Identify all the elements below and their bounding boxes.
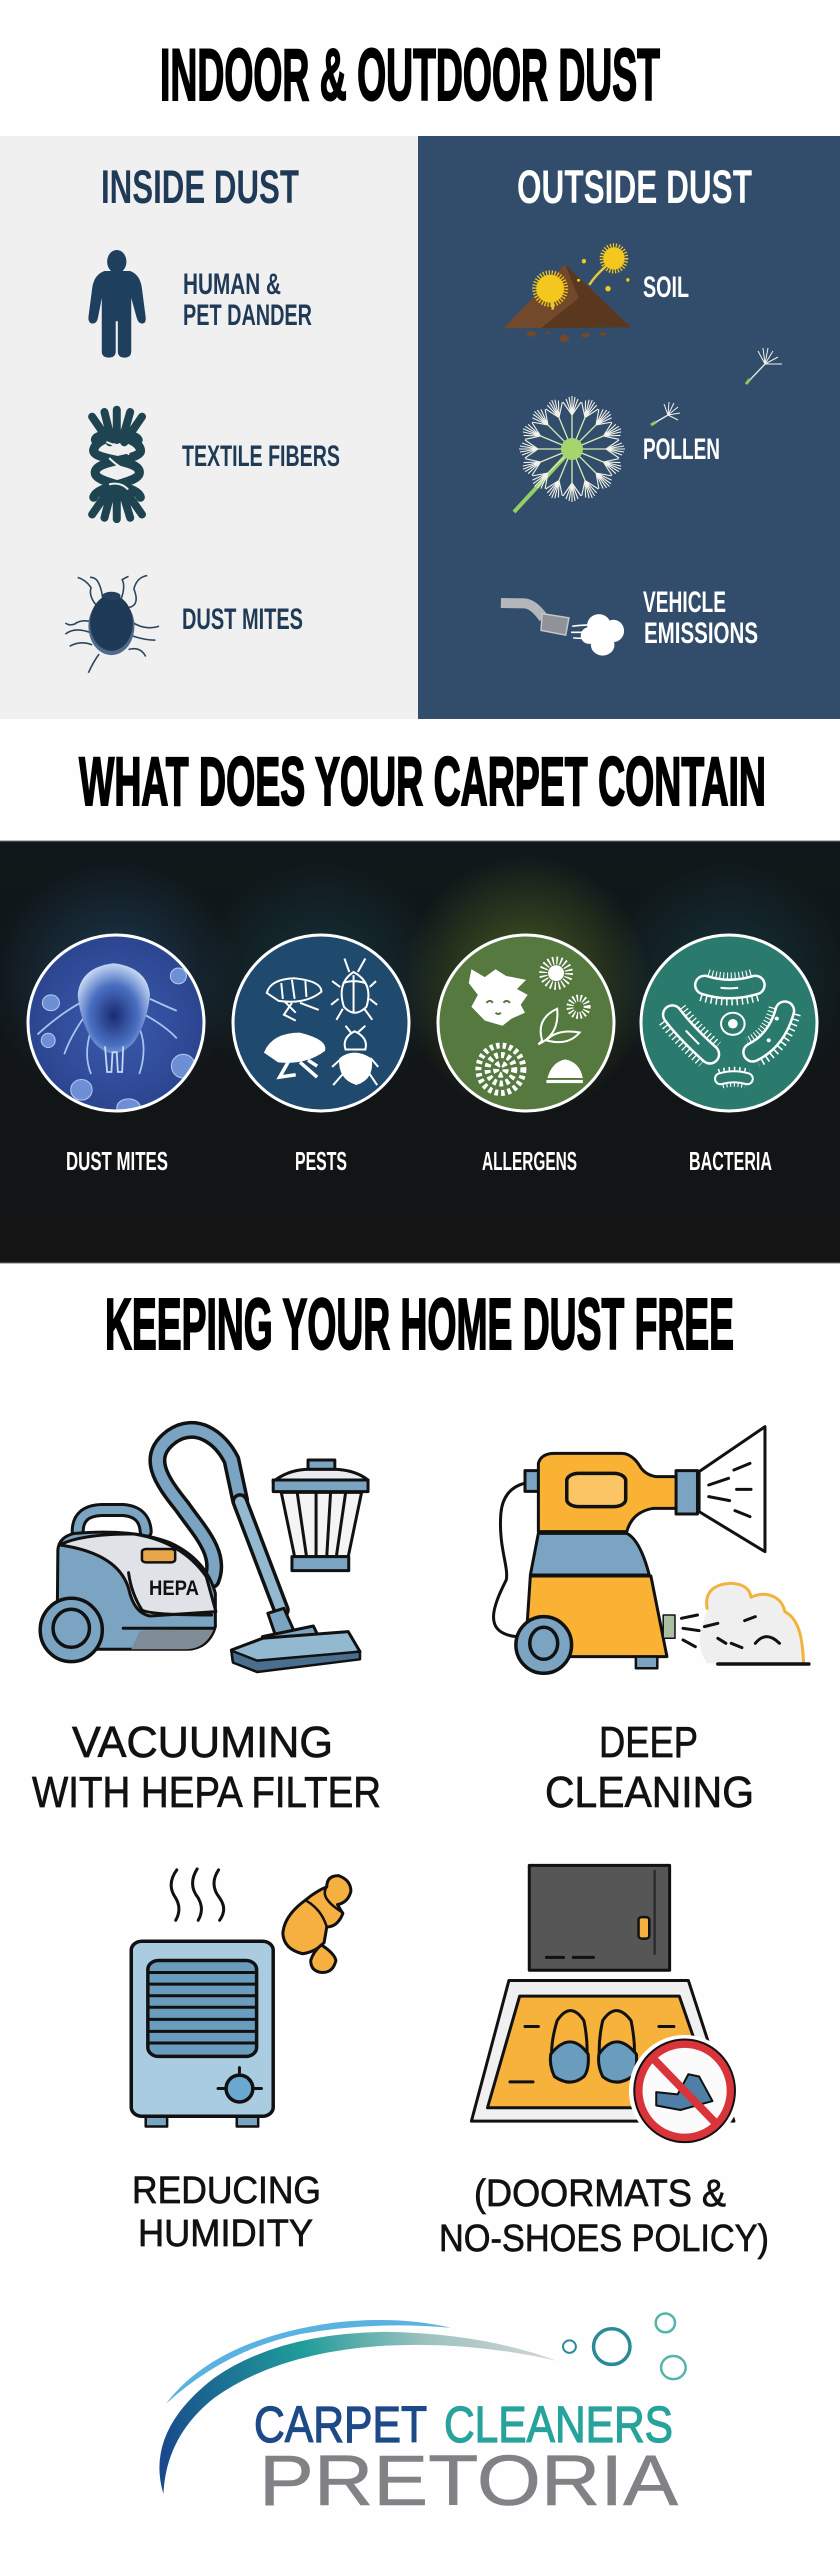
- icon: dust mite: [65, 575, 159, 673]
- text: doormats and no-shoes policy: NO-SHOES POLICY): [439, 2218, 769, 2260]
- label: textile fibers: TEXTILE FIBERS: [182, 440, 340, 473]
- label: HEPA on vacuum: HEPA: [149, 1577, 199, 1600]
- text: doormats and no-shoes policy: (DOORMATS &: [474, 2173, 726, 2215]
- panel: carpet contents dark band: [0, 840, 840, 1264]
- panel: outside dust: [418, 136, 840, 719]
- icon: pet face: [469, 969, 528, 1026]
- label: dust mites: DUST MITES: [182, 603, 303, 636]
- icon: textile fibers rope: [92, 410, 142, 519]
- label: allergens: ALLERGENS: [482, 1146, 577, 1176]
- icon: pollen cluster: [478, 1046, 523, 1093]
- label: pet dander line: PET DANDER: [183, 299, 312, 332]
- icon: flea outline: [267, 978, 321, 1021]
- logo swoosh and bubbles: [159, 2314, 686, 2494]
- text: vacuuming with HEPA filter: WITH HEPA FILTER: [32, 1768, 381, 1817]
- label: vehicle: VEHICLE: [643, 586, 726, 619]
- text: vacuuming with HEPA filter: VACUUMING: [72, 1718, 333, 1767]
- icon: small burst: [570, 998, 587, 1015]
- icon: allergens circle: [438, 935, 614, 1111]
- icon: solid flea: [265, 1034, 324, 1062]
- panel: inside dust: [0, 136, 418, 719]
- logo text: pretoria: PRETORIA: [259, 2442, 679, 2521]
- icon: floating seed top right: [746, 348, 782, 384]
- text: reducing humidity: HUMIDITY: [138, 2213, 313, 2255]
- text: doormats and no-shoes policy: [439, 2173, 769, 2260]
- text: vacuuming with HEPA filter: [32, 1718, 381, 1817]
- icon: vehicle exhaust: [501, 603, 624, 656]
- label: pests: PESTS: [295, 1146, 347, 1176]
- icon: dehumidifier: [131, 1869, 351, 2127]
- label: pollen: POLLEN: [643, 433, 720, 466]
- label: human and pet dander: HUMAN &: [183, 268, 281, 301]
- icon: deep cleaning machine: [494, 1427, 809, 1673]
- icon: leaves: [538, 1009, 580, 1044]
- label: emissions: EMISSIONS: [644, 617, 758, 650]
- icon: no shoes sign: [629, 2035, 740, 2147]
- icon: floating seed middle: [651, 402, 680, 425]
- icon: beetle outline: [331, 959, 377, 1020]
- text: reducing humidity: REDUCING: [132, 2170, 321, 2212]
- icon: dust mite microscope circle: [28, 935, 204, 1116]
- icon: sun spore: [548, 965, 564, 981]
- label: dust mites: DUST MITES: [66, 1146, 168, 1176]
- text: deep cleaning: [545, 1718, 754, 1817]
- icon: solid beetle: [340, 1054, 371, 1084]
- text: reducing humidity: [132, 2170, 321, 2255]
- icon: vacuum with HEPA filter: [40, 1430, 368, 1672]
- icon: bacteria circle: [641, 935, 817, 1111]
- heading: inside dust: INSIDE DUST: [101, 160, 299, 213]
- icon: doormat and no-shoes sign: [471, 1865, 740, 2147]
- label: soil: SOIL: [643, 271, 689, 304]
- logo text: cleaners: CLEANERS: [444, 2396, 673, 2453]
- text: deep cleaning: CLEANING: [545, 1768, 754, 1817]
- icon: door: [529, 1865, 670, 1970]
- icon: pollen dandelion: [514, 396, 625, 512]
- logo: carpet cleaners pretoria: [159, 2314, 686, 2521]
- icon: pests circle: [233, 935, 409, 1111]
- icon: soil mound with yellow flowers: [504, 246, 631, 342]
- logo text: carpet: CARPET: [254, 2396, 427, 2453]
- label: bacteria: BACTERIA: [689, 1146, 772, 1176]
- icon: human figure: [88, 250, 146, 358]
- icon: doormat with slippers: [471, 1981, 734, 2121]
- text: deep cleaning: DEEP: [599, 1718, 698, 1767]
- icon: dust pile: [547, 1059, 583, 1078]
